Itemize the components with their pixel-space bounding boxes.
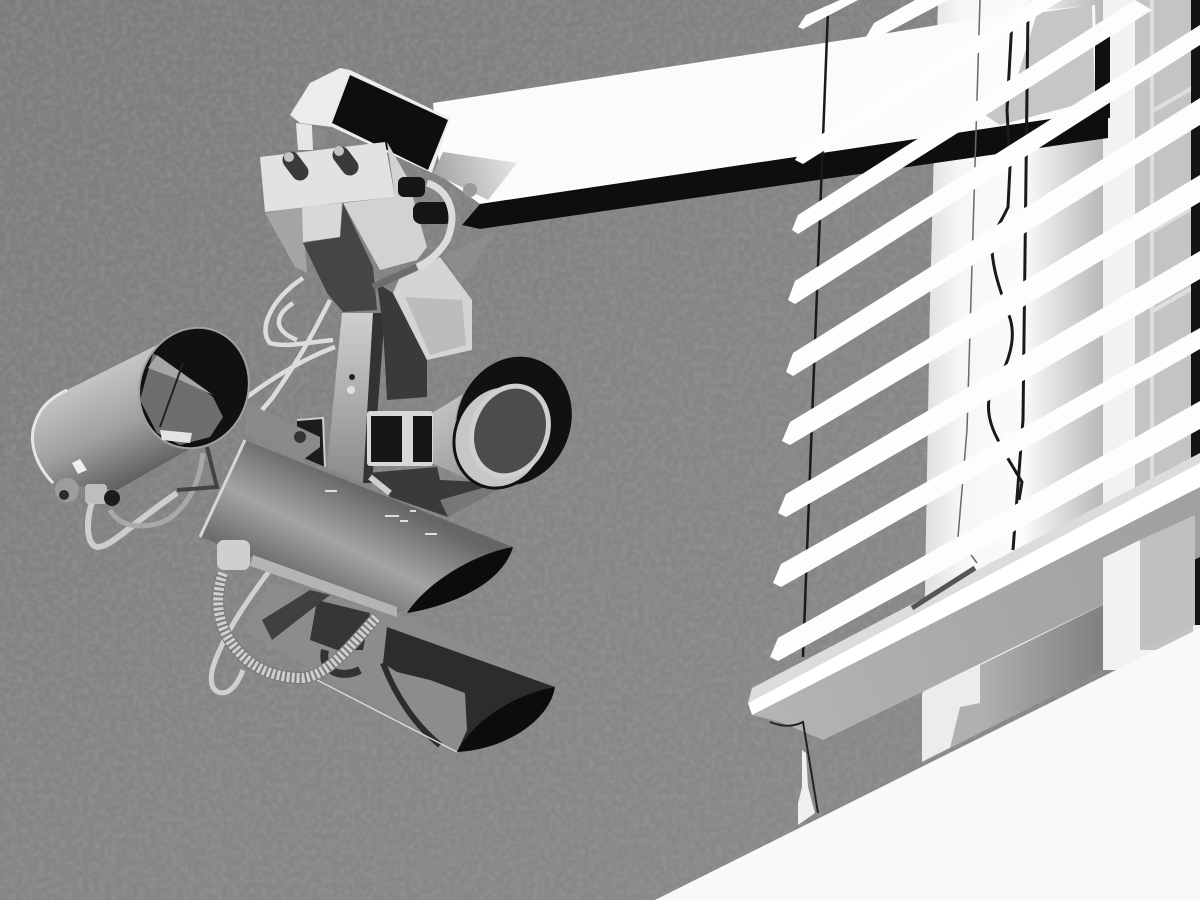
lower camera	[243, 583, 555, 752]
antenna under the sill	[770, 722, 818, 825]
building seen below the sill	[922, 515, 1195, 762]
junction box	[260, 142, 477, 312]
lower building ledge	[655, 628, 1200, 900]
flexible conduit on box	[417, 183, 452, 267]
camera cluster	[32, 68, 592, 752]
lower box and side plate	[393, 230, 497, 360]
centre camera	[200, 440, 513, 617]
white cables behind	[247, 278, 335, 410]
window blinds	[770, 0, 1200, 661]
thin cable under centre camera	[211, 570, 270, 693]
right camera	[367, 338, 592, 517]
cords of the blinds	[803, 0, 1028, 657]
dark mount strip	[377, 283, 427, 400]
wall-mounted arm	[433, 5, 1110, 229]
bolts	[284, 146, 350, 172]
left camera	[32, 312, 325, 547]
flexible conduit in front of lower camera	[217, 540, 377, 678]
window sill	[748, 453, 1200, 740]
mount post	[327, 313, 385, 483]
building column and window behind blinds	[922, 0, 1200, 762]
top hood sensor	[290, 68, 450, 173]
